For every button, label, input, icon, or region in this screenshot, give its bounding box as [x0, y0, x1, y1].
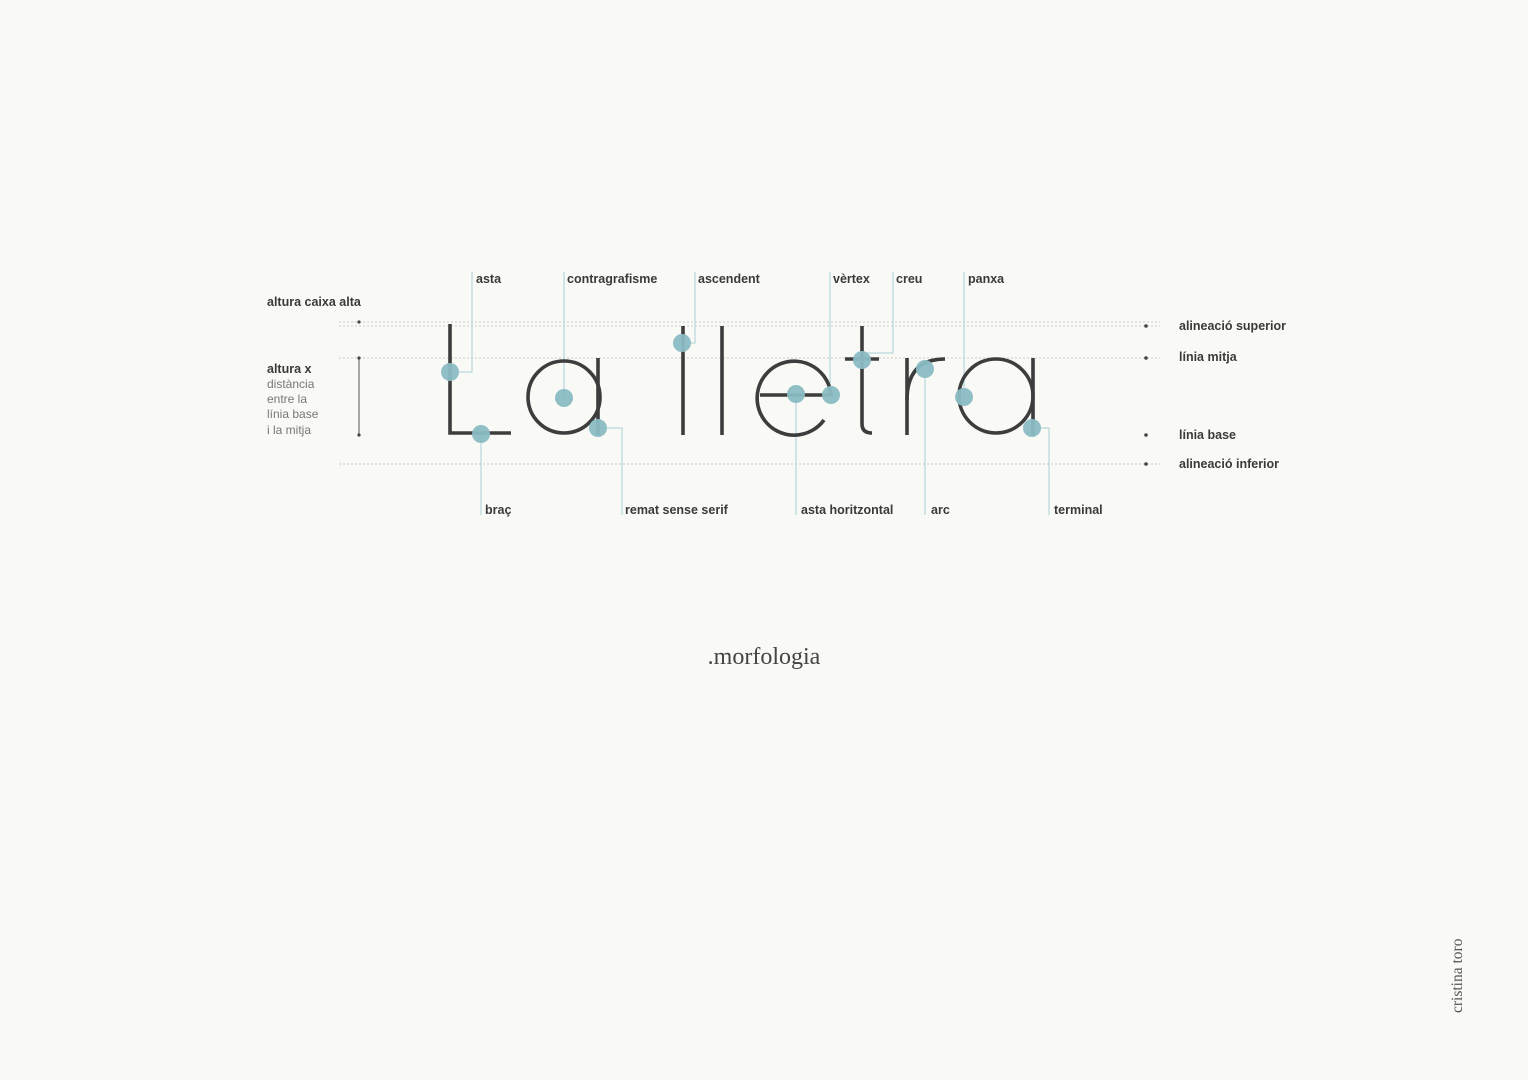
bottom labels: terminal: [1054, 503, 1103, 517]
top labels: creu: [896, 272, 922, 286]
top labels: asta: [476, 272, 502, 286]
bottom labels: [485, 503, 1103, 517]
right labels: línia base: [1179, 428, 1236, 442]
letters: La lletra: [450, 324, 1033, 435]
top labels: vèrtex: [833, 272, 870, 286]
left labels: altura x: [267, 362, 312, 376]
left labels: entre la: [267, 392, 307, 406]
x-height bracket: [357, 320, 361, 437]
left labels: [267, 295, 362, 437]
top labels: contragrafisme: [567, 272, 657, 286]
left labels: i la mitja: [267, 423, 311, 437]
left labels: distància: [267, 377, 315, 391]
leader lines: [450, 272, 1049, 515]
right labels: alineació superior: [1179, 319, 1286, 333]
top labels: panxa: [968, 272, 1005, 286]
right labels: alineació inferior: [1179, 457, 1279, 471]
bottom labels: remat sense serif: [625, 503, 729, 517]
bottom labels: asta horitzontal: [801, 503, 893, 517]
bottom labels: braç: [485, 503, 511, 517]
top labels: ascendent: [698, 272, 761, 286]
bottom labels: arc: [931, 503, 950, 517]
author: cristina toro: [1449, 938, 1466, 1013]
left labels: línia base: [267, 407, 319, 421]
left labels: altura caixa alta: [267, 295, 362, 309]
right labels: [1144, 319, 1286, 471]
top labels: [476, 272, 1005, 286]
annotation dots: [441, 334, 1041, 443]
right labels: línia mitja: [1179, 350, 1238, 364]
title: .morfologia: [708, 644, 821, 670]
